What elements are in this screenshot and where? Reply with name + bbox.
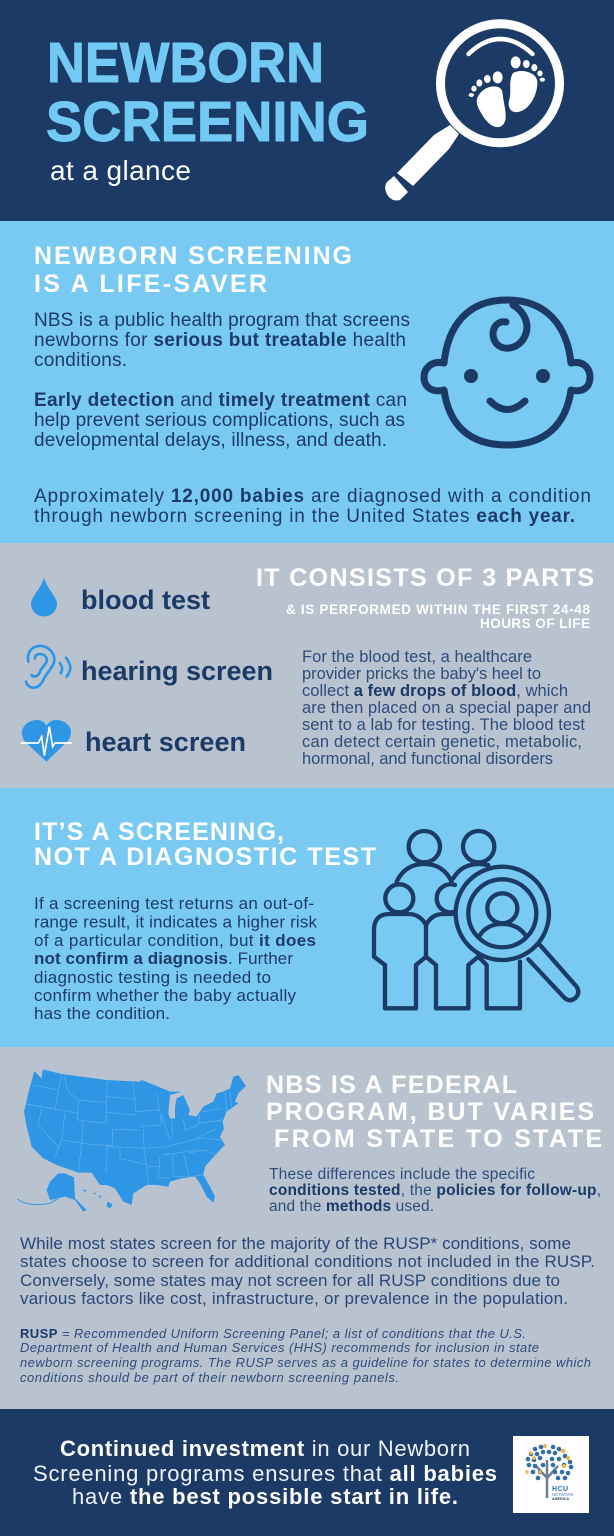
icon: heart with pulse (21, 720, 72, 762)
panel: screening not diagnostic (0, 788, 614, 1047)
text block: blood test description: For the blood test, a healthcare (302, 648, 532, 666)
subheading: & IS PERFORMED WITHIN THE FIRST 24-48 (286, 602, 590, 617)
panel: life-saver (0, 221, 614, 543)
text block: differences: These differences include the specific (269, 1166, 535, 1183)
text block: intro (34, 310, 410, 451)
text block: differences: conditions tested, the policies for follow-up, (269, 1182, 601, 1199)
icon: magnifying glass with baby feet (385, 24, 560, 200)
icon: people under magnifier (374, 831, 578, 1008)
text block: blood test description: collect a few drops of blood, which (302, 682, 568, 700)
closing statement: have the best possible start in life. (72, 1484, 458, 1509)
closing statement: Continued investment in our Newborn (60, 1436, 470, 1461)
text block: intro: Early detection and timely treatment can (34, 390, 407, 411)
text block: explanation (34, 894, 318, 1023)
text block: explanation: has the condition. (34, 1004, 170, 1023)
panel: three parts (0, 543, 614, 788)
panel: federal program (0, 1047, 614, 1409)
heading: PROGRAM, BUT VARIES (266, 1098, 594, 1126)
text block: intro: NBS is a public health program that screens (34, 310, 410, 331)
text block: explanation: range result, it indicates a higher risk (34, 912, 318, 932)
label: heart screen: heart screen (85, 727, 246, 757)
text block: blood test description: can detect certain genetic, metabolic, (302, 733, 582, 751)
heading (34, 818, 376, 871)
footnote: RUSP definition: RUSP = Recommended Uniform Screening Panel; a list of conditions that the U.S. (20, 1326, 526, 1341)
text block: differences (269, 1166, 601, 1215)
statistic: through newborn screening in the United States each year. (34, 506, 575, 527)
text block: intro: developmental delays, illness, and death. (34, 430, 387, 451)
text block: explanation: If a screening test returns an out-of- (34, 894, 314, 913)
logo: HCU Network America: AMERICA (552, 1497, 569, 1501)
statistic (34, 486, 591, 527)
subtitle: at a glance (50, 155, 191, 186)
footnote: RUSP definition: conditions should be part of their newborn screening panels. (20, 1370, 399, 1385)
text block: RUSP variation: While most states screen for the majority of the RUSP* conditions, some (20, 1234, 571, 1253)
panel: footer (0, 1409, 614, 1536)
footnote: RUSP definition: newborn screening programs. The RUSP serves as a guideline for states to determine which (20, 1355, 591, 1370)
title: SCREENING (46, 90, 369, 154)
logo: HCU Network America: NETWORK (552, 1492, 574, 1497)
closing statement (33, 1436, 497, 1509)
logo: HCU Network America (513, 1436, 589, 1513)
text block: intro: conditions. (34, 350, 127, 371)
text block: blood test description (302, 648, 591, 768)
logo: HCU Network America: HCU (552, 1486, 568, 1493)
closing statement: Screening programs ensures that all babies (33, 1461, 497, 1486)
panel: header (0, 0, 614, 221)
text block: blood test description: sent to a lab for testing. The blood test (302, 716, 585, 734)
heading: NBS IS A FEDERAL (266, 1071, 517, 1099)
text block: explanation: of a particular condition, but it does (34, 931, 316, 950)
map: United States (17, 1069, 246, 1212)
title: NEWBORN (47, 31, 324, 95)
heading (34, 242, 352, 298)
footnote: RUSP definition (20, 1326, 591, 1385)
text block: RUSP variation (20, 1234, 595, 1308)
text block: blood test description: hormonal, and functional disorders (302, 750, 553, 768)
heading: IT CONSISTS OF 3 PARTS (256, 564, 594, 592)
icon: ear (26, 646, 70, 688)
text block: explanation: not confirm a diagnosis. Further (34, 949, 293, 968)
text block: explanation: diagnostic testing is needed to (34, 968, 271, 987)
label: hearing screen: hearing screen (81, 656, 273, 686)
text block: intro: newborns for serious but treatable health (34, 330, 406, 351)
text block: intro: help prevent serious complications, such as (34, 410, 405, 431)
icon: baby face (424, 300, 590, 445)
text block: explanation: confirm whether the baby actually (34, 986, 296, 1005)
heading: IS A LIFE-SAVER (34, 270, 267, 298)
subheading (286, 602, 590, 631)
text block: RUSP variation: various factors like cost, infrastructure, or prevalence in the population. (20, 1289, 568, 1308)
footnote: RUSP definition: Department of Health and Human Services (HHS) recommends for inclusion in state (20, 1340, 539, 1355)
text block: RUSP variation: states choose to screen for additional conditions not included in the RUSP. (20, 1252, 595, 1271)
label: blood test: blood test (81, 585, 210, 615)
text block: RUSP variation: Conversely, some states may not screen for all RUSP conditions due to (20, 1271, 560, 1290)
text block: blood test description: are then placed on a special paper and (302, 699, 591, 717)
heading: NOT A DIAGNOSTIC TEST (34, 843, 376, 871)
icon: blood drop (31, 578, 57, 616)
heading: IT’S A SCREENING, (34, 818, 284, 846)
text block: blood test description: provider pricks the baby's heel to (302, 665, 541, 683)
statistic: Approximately 12,000 babies are diagnosed with a condition (34, 486, 591, 507)
subheading: HOURS OF LIFE (480, 616, 590, 631)
heading: NEWBORN SCREENING (34, 242, 352, 270)
heading: FROM STATE TO STATE (274, 1125, 602, 1153)
heading (266, 1071, 602, 1153)
title (46, 31, 369, 154)
text block: differences: and the methods used. (269, 1198, 434, 1215)
